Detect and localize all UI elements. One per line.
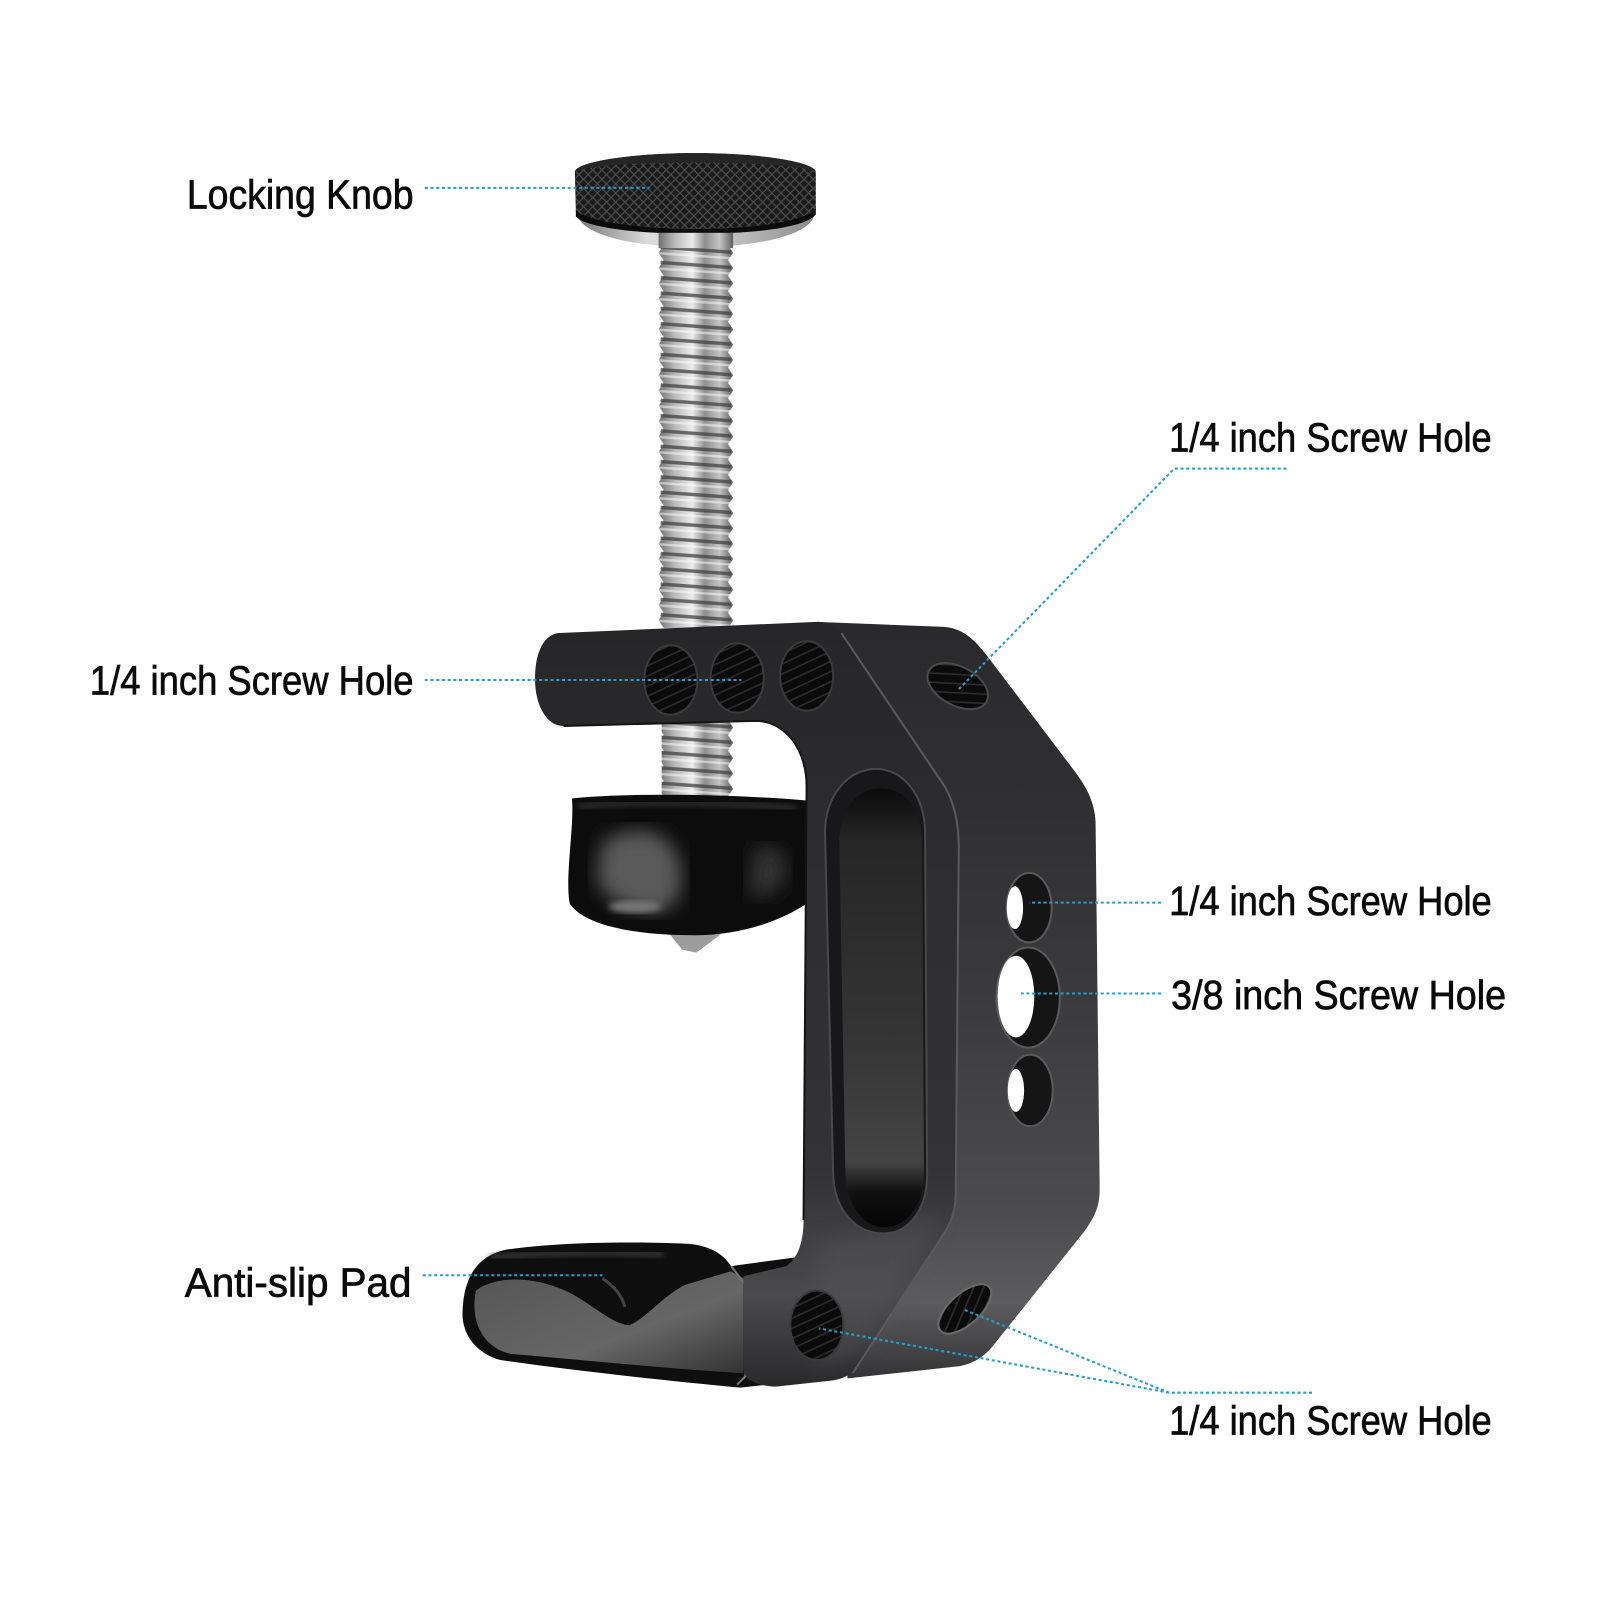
bevel edge xyxy=(841,633,959,1373)
label: top right screw hole xyxy=(958,414,1492,690)
oblong slot xyxy=(825,769,927,1233)
label: 3/8 inch screw hole: 3/8 inch Screw Hole xyxy=(1171,972,1506,1018)
label: locking knob: Locking Knob xyxy=(187,171,414,217)
top side hole xyxy=(920,654,996,719)
screw shaft lower xyxy=(662,720,733,812)
side face xyxy=(817,622,1100,1378)
screw shaft upper xyxy=(659,230,733,628)
lower anti-slip pad xyxy=(462,1242,807,1388)
side through holes xyxy=(997,873,1060,1126)
label: anti-slip pad: Anti-slip Pad xyxy=(185,1260,411,1306)
bottom front hole xyxy=(790,1291,843,1360)
front face xyxy=(535,622,959,1387)
label: left screw hole: 1/4 inch Screw Hole xyxy=(90,657,414,703)
label: right screw hole: 1/4 inch Screw Hole xyxy=(1169,878,1492,924)
label: top right screw hole: 1/4 inch Screw Hole xyxy=(1169,414,1492,460)
inner arm edge highlight xyxy=(564,721,807,1220)
locking knob xyxy=(575,153,816,248)
swivel pad xyxy=(568,795,807,953)
clamp product photo illustration xyxy=(462,153,1100,1388)
clamp body xyxy=(535,622,1100,1387)
lightwash on lower face xyxy=(817,1215,944,1368)
bottom side hole xyxy=(930,1276,999,1342)
label: bottom screw holes xyxy=(819,1310,1492,1444)
arm holes xyxy=(644,641,833,715)
label: bottom screw holes: 1/4 inch Screw Hole xyxy=(1169,1398,1492,1444)
